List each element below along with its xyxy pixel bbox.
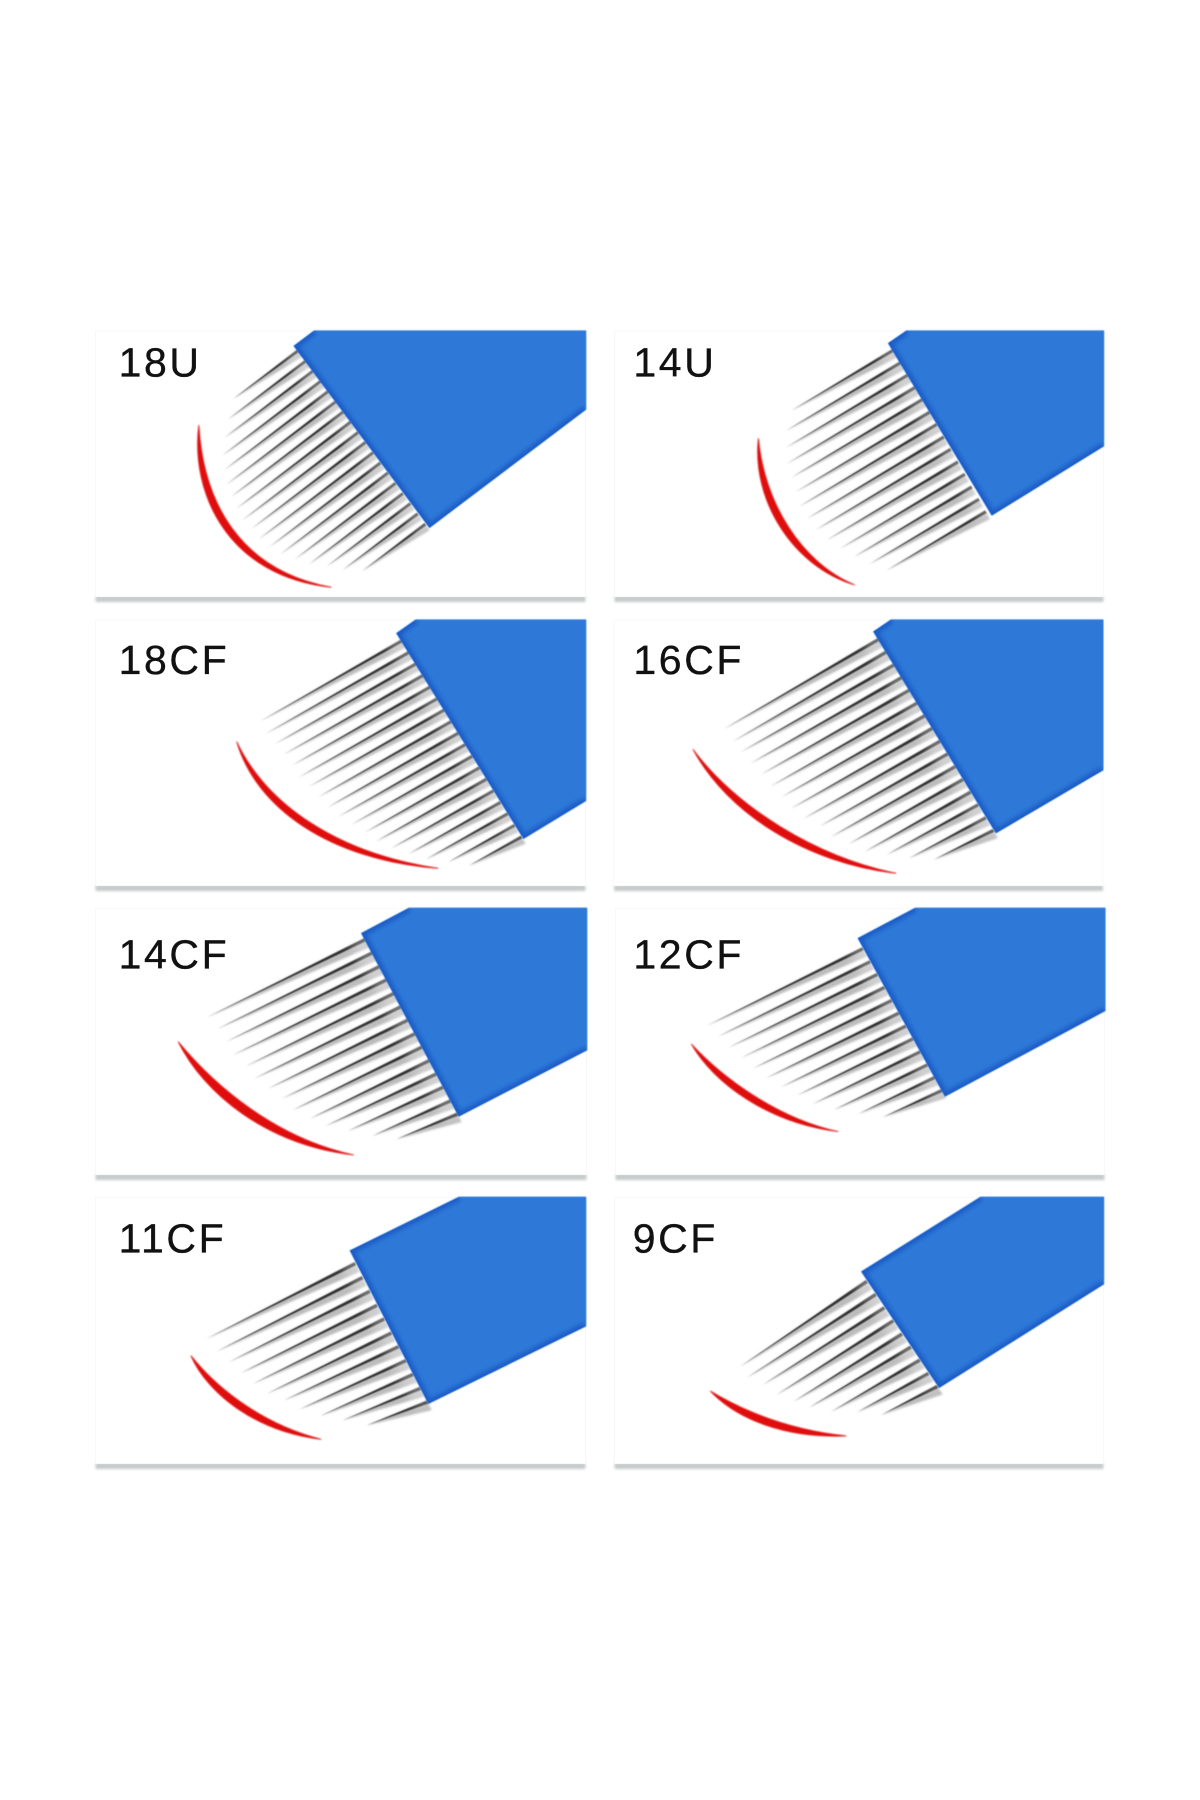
blade: 18CF <box>397 620 586 838</box>
red curve: 18CF <box>237 742 438 868</box>
card <box>96 331 586 602</box>
label: 14U: 14U <box>633 340 716 386</box>
card <box>614 331 1104 602</box>
label: 14CF: 14CF <box>119 931 229 977</box>
blade: 12CF <box>858 908 1105 1096</box>
label: 18CF: 18CF <box>119 637 229 683</box>
card <box>96 620 586 891</box>
panel: 18CF <box>96 620 586 891</box>
red curve: 18U <box>198 425 331 587</box>
red curve: 14U <box>758 438 855 585</box>
blade: 11CF <box>350 1197 586 1403</box>
label: 11CF: 11CF <box>119 1216 226 1262</box>
blade: 14CF <box>362 908 587 1116</box>
needles: 18U <box>222 345 431 571</box>
panel: 18U <box>96 331 586 602</box>
red curve: 14CF <box>178 1042 354 1155</box>
blade: 14U <box>889 331 1104 515</box>
blade: 18U <box>294 331 586 527</box>
card <box>614 620 1103 891</box>
label: 12CF: 12CF <box>633 931 744 977</box>
red curve: 11CF <box>191 1356 321 1439</box>
panel: 14CF <box>96 908 587 1180</box>
needles: 9CF <box>740 1270 943 1415</box>
card <box>96 908 586 1180</box>
panel: 12CF <box>616 908 1105 1180</box>
label: 16CF: 16CF <box>633 637 744 683</box>
label: 18U: 18U <box>119 340 202 386</box>
label: 9CF: 9CF <box>633 1216 718 1262</box>
red curve: 9CF <box>710 1391 846 1436</box>
needles: 11CF <box>206 1249 432 1425</box>
card <box>96 1197 586 1469</box>
needles: 12CF <box>707 937 947 1117</box>
card <box>616 908 1104 1180</box>
needles: 14CF <box>207 933 462 1139</box>
red curve: 16CF <box>693 749 896 873</box>
needles: 18CF <box>261 632 526 866</box>
red curve: 12CF <box>691 1044 838 1132</box>
needles: 14U <box>786 342 994 570</box>
panel: 16CF <box>614 620 1103 891</box>
panel: 11CF <box>96 1197 586 1469</box>
blade: 16CF <box>874 620 1103 833</box>
panel: 9CF <box>614 1197 1104 1469</box>
needles: 16CF <box>724 631 998 860</box>
card <box>614 1197 1104 1469</box>
panel: 14U <box>614 331 1104 602</box>
blade: 9CF <box>862 1197 1104 1387</box>
